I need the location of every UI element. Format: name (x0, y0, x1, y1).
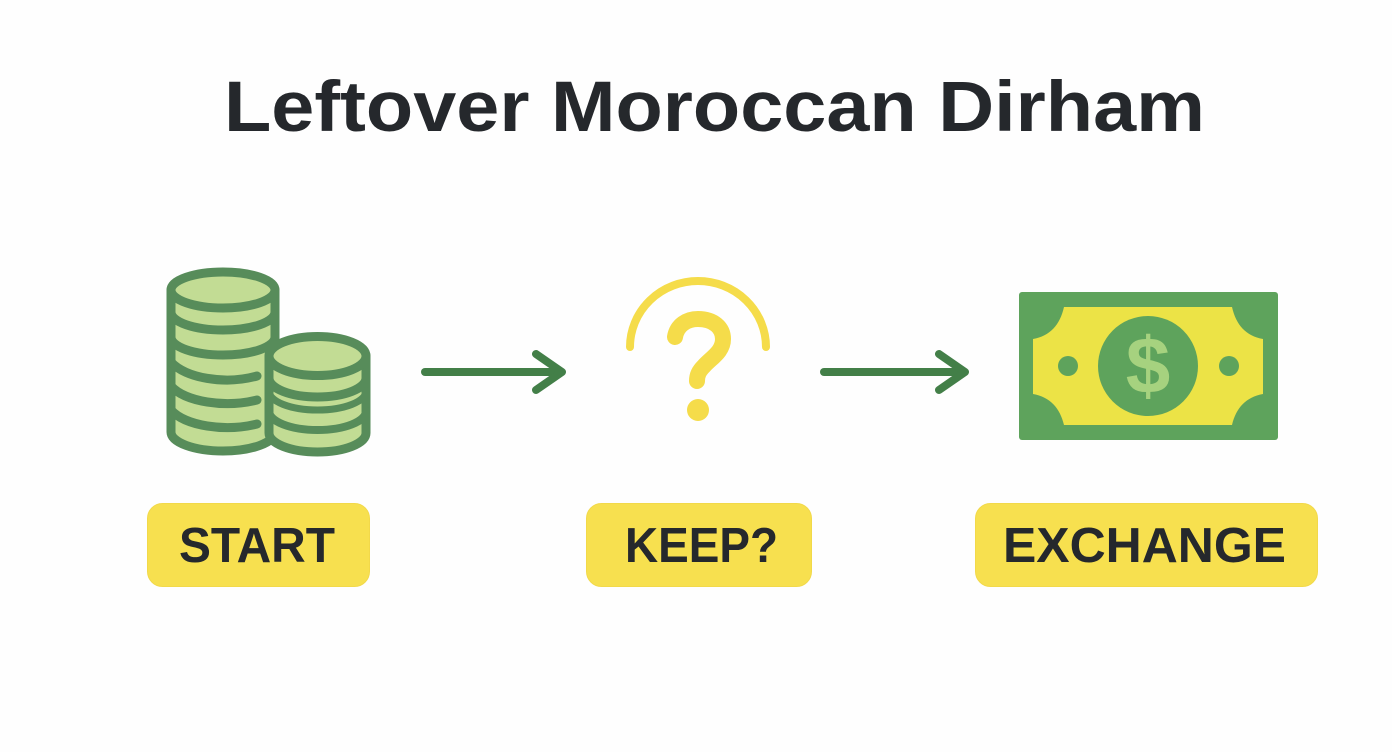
label: exchange (976, 504, 1318, 586)
short coin stack (269, 336, 366, 452)
label: keep (586, 504, 812, 586)
label: keep: KEEP? (625, 519, 778, 573)
label: exchange: EXCHANGE (1003, 519, 1286, 573)
title: Leftover Moroccan Dirham (224, 68, 1205, 147)
label: start: START (179, 519, 335, 573)
arrow: start to keep (425, 354, 562, 390)
icon: stack of coins (171, 272, 366, 452)
tall coin stack (171, 272, 275, 451)
label: start (148, 504, 370, 586)
icon: question mark with arc (630, 281, 766, 421)
dollar sign: $ (1126, 321, 1170, 410)
arrow: keep to exchange (824, 354, 965, 390)
icon: banknote (1019, 292, 1278, 440)
